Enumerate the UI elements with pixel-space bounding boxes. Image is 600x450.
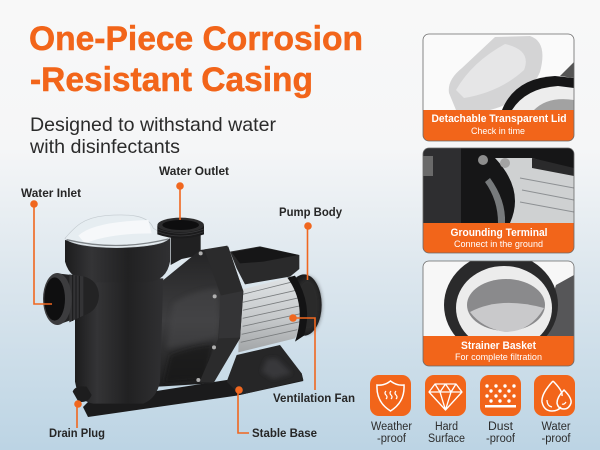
subtitle (29, 114, 277, 158)
motor end cap (286, 274, 322, 336)
callout: ventilation fan: Ventilation Fan (273, 393, 355, 405)
icon: hard surface (425, 375, 466, 445)
callout: pump body: Pump Body (279, 207, 343, 219)
icon: hard surface: Hard (435, 421, 458, 433)
icon: dust-proof (480, 375, 521, 445)
subtitle: Designed to withstand water (30, 114, 277, 136)
inlet mouth (43, 273, 72, 325)
callout: water outlet (159, 166, 229, 220)
motor aluminium body (238, 278, 302, 352)
callout: water outlet: Water Outlet (159, 166, 229, 178)
icon: water-proof: -proof (542, 433, 571, 445)
callout: ventilation fan (273, 314, 355, 405)
terminal box (230, 246, 299, 284)
callout: stable base: Stable Base (252, 428, 317, 440)
icon: hard surface: Surface (428, 433, 465, 445)
title (29, 20, 363, 99)
pump illustration (43, 215, 322, 417)
rear foot (227, 345, 303, 395)
callout: stable base (235, 386, 317, 440)
panel: grounding terminal: Connect in the ground (454, 239, 543, 250)
outlet neck (171, 233, 201, 265)
drain plug (73, 386, 92, 402)
transparent lid (65, 215, 169, 248)
title: One-Piece Corrosion (29, 20, 363, 58)
subtitle: with disinfectants (29, 136, 180, 158)
panel: detachable transparent lid (423, 34, 574, 141)
icon: weather-proof: Weather (371, 421, 412, 433)
callout: water inlet (21, 188, 81, 304)
icon: weather-proof: -proof (377, 433, 407, 445)
panel: grounding terminal: Grounding Terminal (450, 227, 548, 239)
panel: strainer basket: Strainer Basket (461, 340, 536, 352)
panel: detachable transparent lid: Detachable Transparent Lid (432, 113, 566, 125)
panel: strainer basket (423, 253, 574, 366)
icon: water-proof: Water (542, 421, 571, 433)
callout: water inlet: Water Inlet (21, 188, 81, 200)
icon: weather-proof (370, 375, 412, 445)
inlet tube (57, 273, 99, 325)
outlet ring (157, 226, 204, 238)
clamp band (199, 246, 243, 382)
strainer pot (75, 278, 163, 404)
icon: water-proof (534, 375, 575, 445)
icon: dust-proof: -proof (486, 433, 516, 445)
volute (147, 247, 243, 395)
panel: detachable transparent lid: Check in time (471, 126, 525, 137)
callout: drain plug (49, 400, 105, 440)
panel: grounding terminal (423, 148, 574, 253)
base plate (83, 373, 303, 417)
callout: drain plug: Drain Plug (49, 428, 105, 440)
icon: dust-proof: Dust (488, 421, 514, 433)
callout: pump body (279, 207, 343, 280)
title: -Resistant Casing (30, 61, 313, 99)
panel: strainer basket: For complete filtration (455, 352, 542, 363)
